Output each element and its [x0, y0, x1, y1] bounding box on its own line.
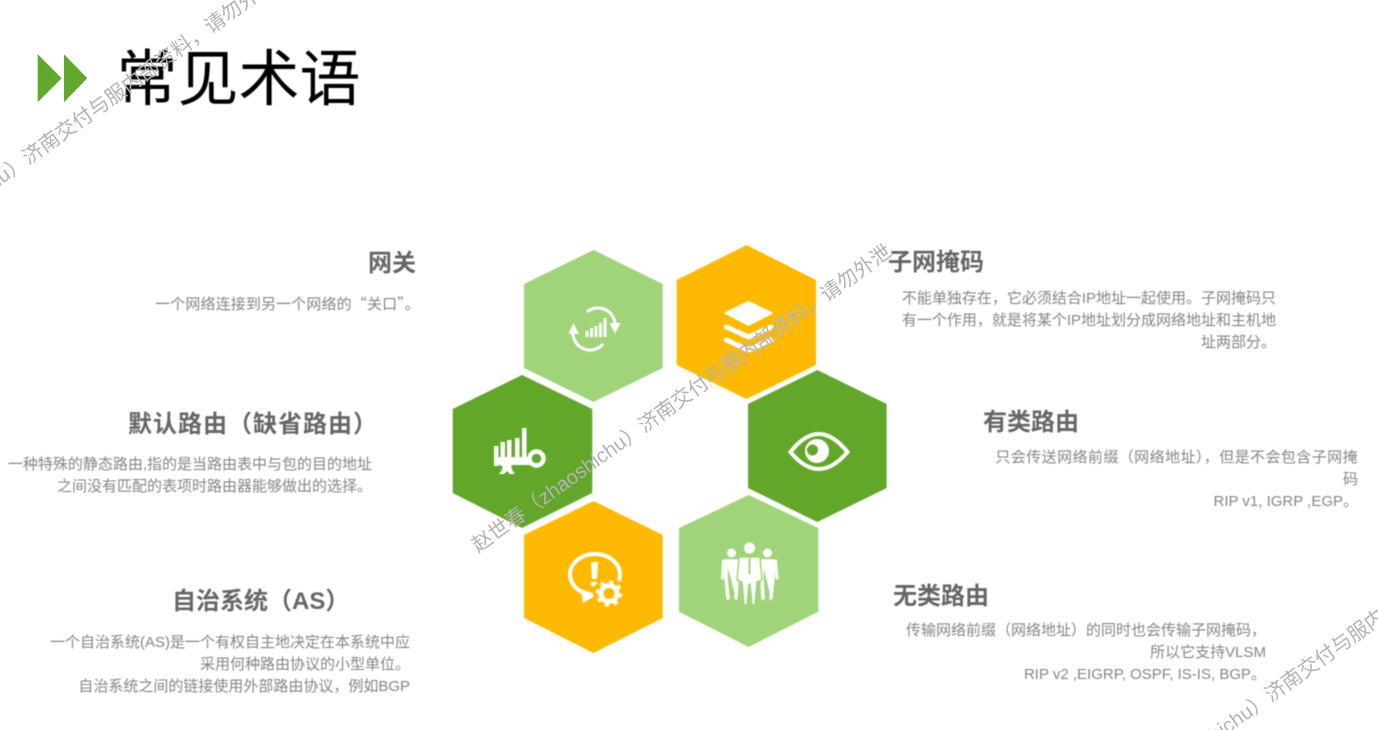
text: classful routing: 只会传送网络前缀（网络地址），但是不会包含子网掩 码 RIP v1, IGRP ,EGP。 — [995, 449, 1358, 510]
icon: double arrow — [38, 54, 88, 102]
hexagon: subnet mask — [677, 245, 816, 399]
hexagon: classful routing — [748, 370, 887, 522]
icon: refresh chart — [568, 308, 620, 350]
text: subnet mask: 不能单独存在，它必须结合IP地址一起使用。子网掩码只 有一个作用，就是将某个IP地址划分成网络地址和主机地 址两部分。 — [902, 290, 1276, 351]
text: default route: 一种特殊的静态路由,指的是当路由表中与包的目的地址 之间没有匹配的表项时路由器能够做出的选择。 — [8, 456, 372, 495]
panel: default route — [8, 410, 378, 495]
panel: gateway — [155, 250, 420, 314]
panel: subnet mask — [888, 248, 1276, 351]
watermark: 赵世春（zhaoshichu）济南交付与服内部资料，请勿外泄 — [467, 240, 896, 557]
text: autonomous system: 一个自治系统(AS)是一个有权自主地决定在本系统中应 采用何种路由协议的小型单位。 自治系统之间的链接使用外部路由协议，例如BGP — [50, 634, 410, 695]
hexagon: autonomous system — [524, 501, 663, 653]
hexagon: default route — [453, 375, 592, 528]
heading: classless routing: 无类路由 — [893, 583, 989, 610]
icon: key and wrench — [494, 428, 544, 474]
hexagon: classless routing — [679, 495, 818, 647]
heading: gateway: 网关 — [368, 250, 416, 277]
hexagon: gateway — [524, 250, 663, 402]
heading: classful routing: 有类路由 — [983, 409, 1079, 436]
panel: autonomous system — [50, 588, 410, 695]
icon: people — [722, 542, 777, 605]
panel: classless routing — [893, 582, 1266, 683]
icon: alert bubble with gear — [570, 554, 625, 610]
title: 常见术语 — [116, 45, 361, 113]
text: gateway: 一个网络连接到另一个网络的“关口”。 — [155, 293, 420, 314]
text: classless routing: 传输网络前缀（网络地址）的同时也会传输子网掩码， 所以它支持VLSM RIP v2 ,EIGRP, OSPF, IS-IS, BGP。 — [906, 622, 1266, 683]
heading: subnet mask: 子网掩码 — [888, 249, 984, 276]
panel: classful routing — [983, 408, 1358, 510]
heading: autonomous system: 自治系统（AS） — [172, 588, 349, 615]
icon: eye — [790, 434, 848, 469]
heading: default route: 默认路由（缺省路由） — [128, 411, 378, 438]
icon: layers — [726, 302, 772, 350]
